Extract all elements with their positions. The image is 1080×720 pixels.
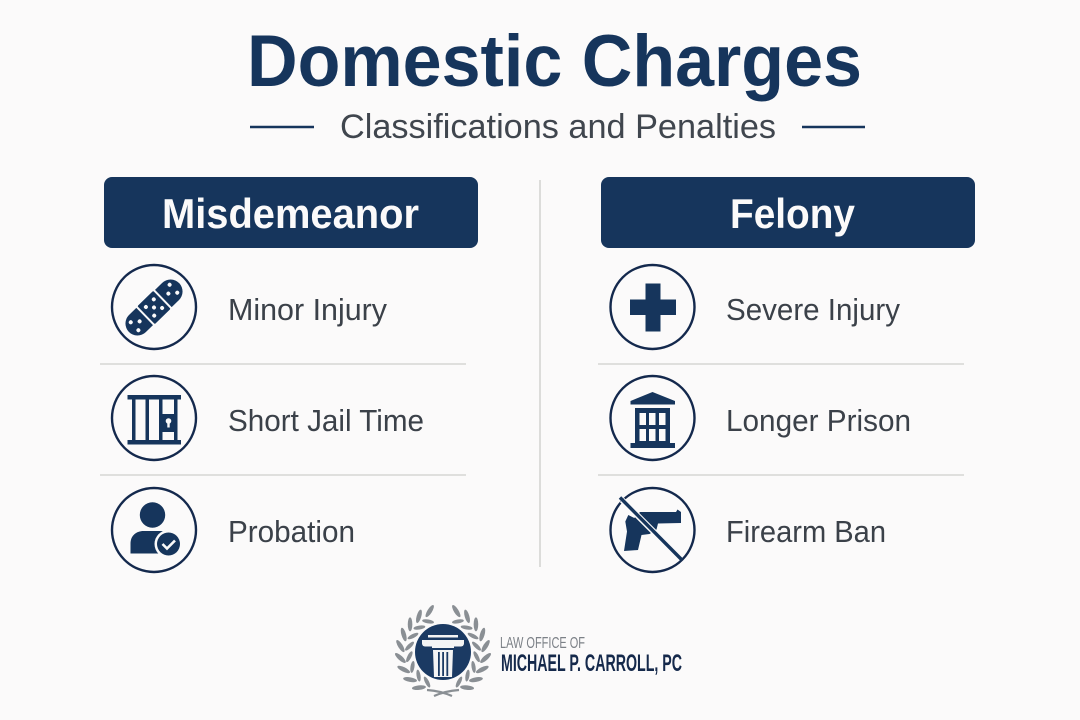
icon: laurel wreath: [394, 604, 492, 696]
icon: column emblem: [415, 624, 471, 680]
heading: misdemeanor: [104, 177, 478, 248]
title: Domestic Charges: [247, 21, 862, 102]
logo text: firm name: MICHAEL P. CARROLL, PC: [501, 650, 682, 677]
label: firearm ban: Firearm Ban: [726, 514, 886, 549]
heading: misdemeanor: Misdemeanor: [162, 190, 419, 237]
icon: prison building: [610, 376, 694, 460]
icon: medical cross: [610, 265, 694, 349]
icon: bandage: [112, 265, 196, 349]
label: severe injury: Severe Injury: [726, 292, 900, 327]
subtitle with side rules: Classifications and Penalties: [340, 108, 776, 146]
label: minor injury: Minor Injury: [228, 292, 387, 327]
panel: felony: [598, 177, 975, 572]
heading: felony: Felony: [730, 190, 856, 237]
logo: law office: [394, 604, 682, 696]
heading: felony: [601, 177, 975, 248]
logo text: law office of: LAW OFFICE OF: [500, 635, 585, 652]
label: probation: Probation: [228, 514, 355, 549]
label: short jail time: Short Jail Time: [228, 403, 424, 438]
icon: firearm ban: [610, 488, 694, 572]
icon: person with check: [112, 488, 196, 572]
label: longer prison: Longer Prison: [726, 403, 911, 438]
panel: misdemeanor: [100, 177, 478, 572]
icon: jail bars: [112, 376, 196, 460]
